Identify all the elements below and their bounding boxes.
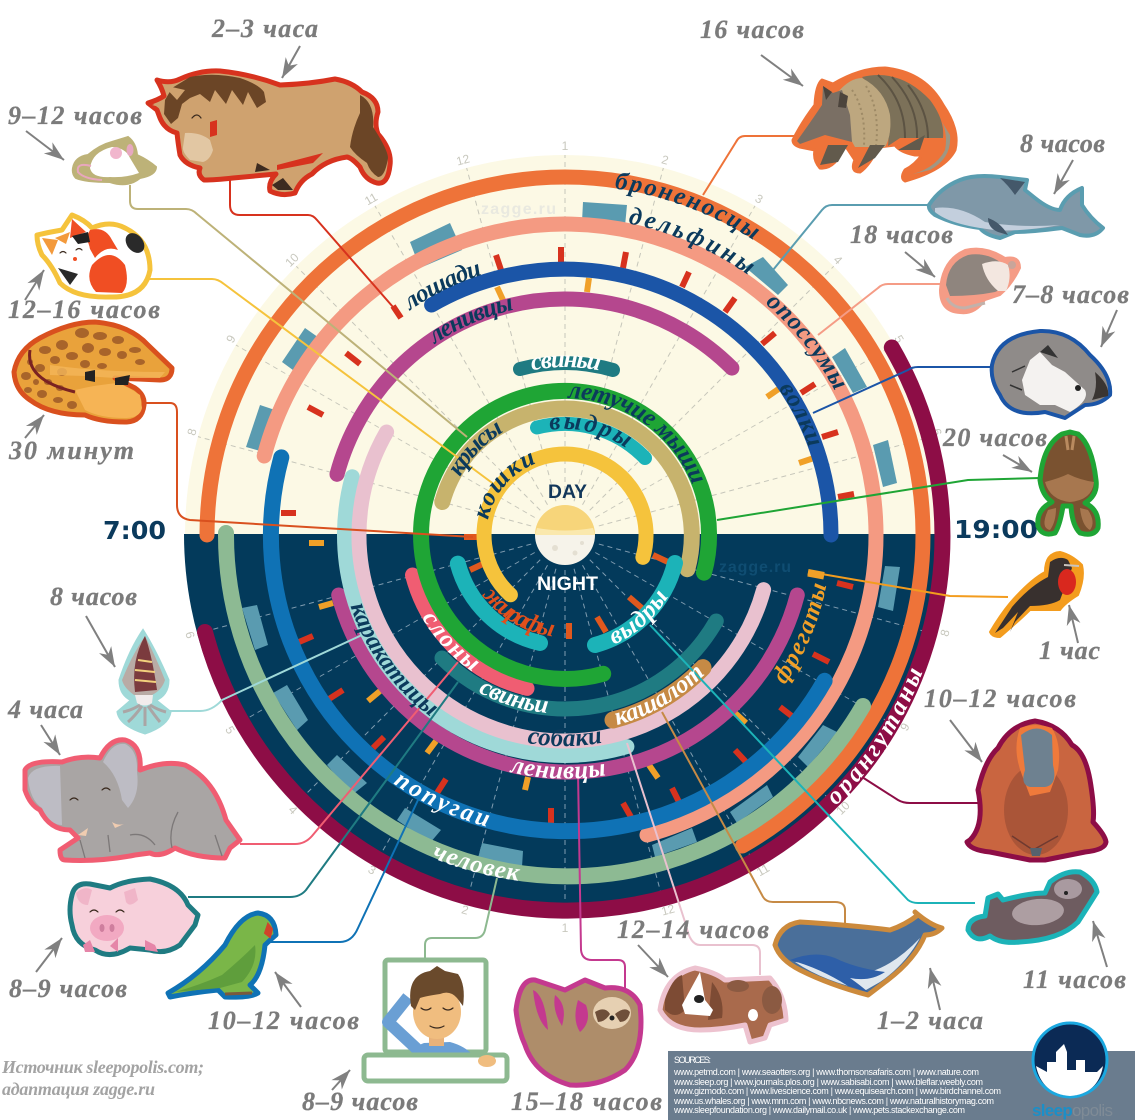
icon: squid [118, 631, 170, 733]
panel: sources [668, 1051, 1135, 1120]
time label: 19:00: 19:00 [954, 515, 1038, 544]
icon: mouse [73, 137, 156, 184]
sun and moon [535, 505, 595, 565]
ring: orangutans [205, 348, 942, 911]
ring: rats [442, 409, 692, 569]
icon: pig [70, 879, 198, 955]
leader line: wolf [813, 367, 992, 413]
arrow: armadillo [761, 55, 803, 86]
ring: elephants [412, 575, 527, 688]
leader line: sea otter [650, 625, 975, 903]
text: cat sleep: 12–16 часов [8, 295, 160, 324]
label: orangutans: орангутаны [830, 668, 922, 804]
arrow: dog [638, 945, 668, 977]
arrow: opossum [905, 252, 935, 277]
arrow: cat [25, 270, 44, 300]
arrow: pig [36, 938, 62, 972]
hour numbers around clock: 6 [929, 427, 945, 437]
text: dolphin sleep: 8 часов [1020, 129, 1105, 158]
label: pigs day: свиньи [532, 356, 600, 370]
label: otters day: выдры [550, 414, 632, 448]
panel: sources: www.petmd.com | www.seaotters.org | www.thomsonsafaris.com | www.nature.com [673, 1067, 979, 1077]
label: sloths night: ленивцы [509, 762, 606, 783]
icon: giraffe [14, 322, 172, 422]
hour numbers around clock: 11 [754, 861, 772, 879]
label: squid: каракатицы [350, 603, 438, 716]
hour numbers around clock: 6 [182, 630, 198, 640]
hour numbers around clock: 12 [660, 901, 677, 918]
icon: wolf [992, 331, 1110, 418]
arrow: giraffe [25, 415, 44, 438]
hour numbers around clock: 5 [891, 333, 907, 346]
leader line: bat [717, 478, 1040, 520]
label: wolves: волки [780, 384, 820, 446]
label: cats: кошки [477, 452, 536, 520]
hour numbers around clock: 10 [282, 250, 302, 270]
tag: cachalot pill [613, 668, 703, 720]
hour numbers around clock: 4 [286, 803, 301, 818]
leader line: horse [230, 180, 393, 307]
text: credit: Источник sleepopolis.com; [1, 1057, 204, 1077]
icon: sperm whale [775, 912, 942, 995]
leader line: sloth [578, 772, 625, 990]
arrow: bat [1003, 455, 1032, 472]
label: otters night: выдры [611, 590, 668, 644]
sleep blocks: teal-blue human-scale bars [242, 202, 900, 867]
leader line: squid [165, 635, 362, 711]
watermark: day: zagge.ru [481, 201, 556, 218]
ring: bats [421, 391, 709, 679]
leader line: dolphin [773, 205, 930, 270]
icon: dolphin [929, 176, 1103, 238]
label: horses: лошади [408, 264, 481, 311]
ring: humans [226, 533, 863, 876]
leader line: frigate bird [810, 572, 1008, 597]
icon: frigate bird [990, 552, 1083, 637]
label: giraffes: жирафы [482, 590, 554, 636]
panel: sources: www.us.whales.org | www.mnn.com | www.nbcnews.com | www.naturalhistorymag.com [673, 1096, 994, 1106]
ring: cats [484, 454, 646, 595]
logo: sleepopolis [1032, 1023, 1113, 1120]
leader line: human [425, 878, 497, 958]
hour numbers around clock: 1 [562, 139, 569, 153]
hour numbers around clock: 5 [222, 724, 238, 737]
text: squid sleep: 8 часов [50, 582, 137, 611]
label: dogs: собаки [528, 731, 602, 746]
text: bat sleep: 20 часов [942, 423, 1047, 452]
icon: parrot [168, 913, 276, 997]
arrow: horse [282, 46, 300, 78]
icon: human in bed [364, 960, 507, 1081]
hour numbers around clock: 12 [455, 151, 472, 168]
label: cachalot: кашалот [615, 667, 704, 725]
icon: elephant [25, 740, 240, 860]
panel: sources: www.sleepfoundation.org | www.dailymail.co.uk | www.pets.stackexchange.com [673, 1105, 965, 1115]
label: humans: человек [434, 847, 520, 881]
icon: horse [148, 71, 390, 195]
hour numbers around clock: 2 [460, 902, 470, 918]
icon: orangutan [967, 721, 1106, 860]
arrow: frigate [1069, 605, 1078, 643]
ring: dolphins and opossums [264, 224, 876, 835]
leader line: mouse [130, 185, 467, 437]
ring: sloths night [339, 595, 797, 772]
hour numbers around clock: 1 [562, 921, 569, 935]
label: dolphins: дельфины [629, 207, 754, 274]
panel: sources: SOURCES: [674, 1055, 711, 1065]
short red sleep ticks [281, 247, 854, 823]
leader line: cat [148, 279, 495, 485]
arrow: human [332, 1070, 350, 1090]
leader line: dog [627, 743, 760, 975]
text: cachalot sleep: 1–2 часа [877, 1006, 983, 1035]
heading: DAY: DAY [548, 482, 587, 503]
ring: pigs day [520, 363, 613, 370]
text: wolf sleep: 7–8 часов [1012, 280, 1129, 309]
ring: dogs [359, 432, 764, 741]
text: pig sleep: 8–9 часов [9, 974, 127, 1003]
arrow: orangutan [950, 720, 982, 762]
text: parrot sleep: 10–12 часов [208, 1006, 359, 1035]
hour numbers around clock: 9 [223, 332, 239, 345]
label: bats: летучие мыши [567, 386, 703, 484]
ring: armadillos [207, 177, 923, 846]
arrow: wolf [1101, 310, 1117, 347]
arrow: sea otter [1093, 921, 1107, 967]
time label: 7:00: 7:00 [103, 516, 166, 545]
arrow: squid [86, 616, 115, 667]
label: rats: крысы [450, 422, 503, 476]
heading: NIGHT: NIGHT [537, 574, 598, 595]
hour numbers around clock: 9 [897, 720, 913, 733]
arrow: elephant [41, 725, 60, 755]
text: elephant sleep: 4 часа [7, 695, 83, 724]
text: credit: адаптация zagge.ru [2, 1079, 155, 1099]
short giraffe sleep ticks [464, 537, 668, 639]
hour numbers around clock [182, 139, 953, 935]
leader line: cachalot [662, 712, 845, 925]
arrow: dolphin [1054, 160, 1073, 194]
leader line: armadillo [703, 136, 795, 195]
label: frigate birds: фрегаты [774, 583, 826, 684]
icon: sloth [516, 980, 641, 1085]
hour numbers around clock: 11 [362, 190, 380, 208]
text: sea otter sleep: 11 часов [1023, 965, 1126, 994]
hour numbers around clock: 8 [184, 427, 200, 437]
label: sloths day: ленивцы [433, 298, 513, 344]
icon: cat [37, 215, 150, 297]
ring: horses and wolves [432, 269, 831, 535]
text: horse sleep: 2–3 часа [211, 14, 318, 43]
icon: sea otter [968, 872, 1097, 942]
icon: bat [1038, 432, 1098, 534]
text: mouse sleep: 9–12 часов [8, 101, 142, 130]
icon: opossum [940, 249, 1020, 313]
hour numbers around clock: 10 [833, 798, 853, 818]
panel: sources: www.sleep.org | www.journals.plos.org | www.sabisabi.com | www.bleflar.weebly.com [673, 1077, 983, 1087]
ring: sloths day [337, 299, 732, 474]
ring: parrots [271, 457, 825, 831]
hour numbers around clock: 4 [831, 253, 846, 268]
ring: otters day [537, 424, 645, 458]
hour numbers around clock: 2 [660, 152, 670, 168]
leader line: parrot [270, 800, 418, 942]
hour numbers around clock: 8 [937, 628, 953, 638]
text: giraffe sleep: 30 минут [8, 436, 134, 465]
text: sloth sleep: 15–18 часов [511, 1087, 662, 1116]
panel: day half of clock [185, 155, 945, 535]
text: frigate sleep: 1 час [1039, 636, 1100, 665]
label: pigs night: свиньи [480, 684, 548, 713]
text: armadillo sleep: 16 часов [700, 15, 804, 44]
ring: squid [344, 477, 627, 755]
short orange sleep ticks [309, 278, 824, 790]
watermark: night: zagge.ru [719, 559, 791, 576]
leader line: elephant [240, 662, 458, 844]
text: dog sleep: 12–14 часов [617, 915, 769, 944]
label: opossums: опоссумы [766, 298, 845, 390]
hour numbers around clock: 3 [366, 862, 379, 878]
icon: dog [660, 968, 786, 1042]
label: parrots: попугаи [394, 774, 490, 826]
leader line: pig [188, 682, 458, 897]
arrow: mouse [26, 131, 64, 160]
text: orangutan sleep: 10–12 часов [924, 684, 1076, 713]
icon: armadillo [793, 68, 956, 181]
panel: sources: www.gizmodo.com | www.livescience.com | www.equisearch.com | www.birdchannel.com [673, 1086, 1001, 1096]
arrow: parrot [275, 972, 301, 1007]
ring: otters night right [595, 563, 675, 645]
leader line: opossum [818, 284, 945, 335]
label: armadillos: броненосцы [616, 172, 760, 240]
arrow: cachalot [930, 968, 940, 1010]
leader tick: frigate start [808, 573, 824, 576]
text: human sleep: 8–9 часов [302, 1087, 418, 1116]
text: opossum sleep: 18 часов [850, 220, 953, 249]
leader line: orangutan [862, 777, 1000, 803]
leader line: giraffe [145, 403, 473, 537]
label: elephants: слоны [423, 614, 479, 672]
ring: otters night left [458, 564, 540, 643]
text: credit [1, 1057, 204, 1099]
ring: pigs night [442, 621, 716, 709]
logo: sleepopolis: sleepopolis [1032, 1101, 1113, 1120]
hour numbers around clock: 3 [753, 191, 766, 207]
panel: night half of clock [184, 534, 946, 915]
